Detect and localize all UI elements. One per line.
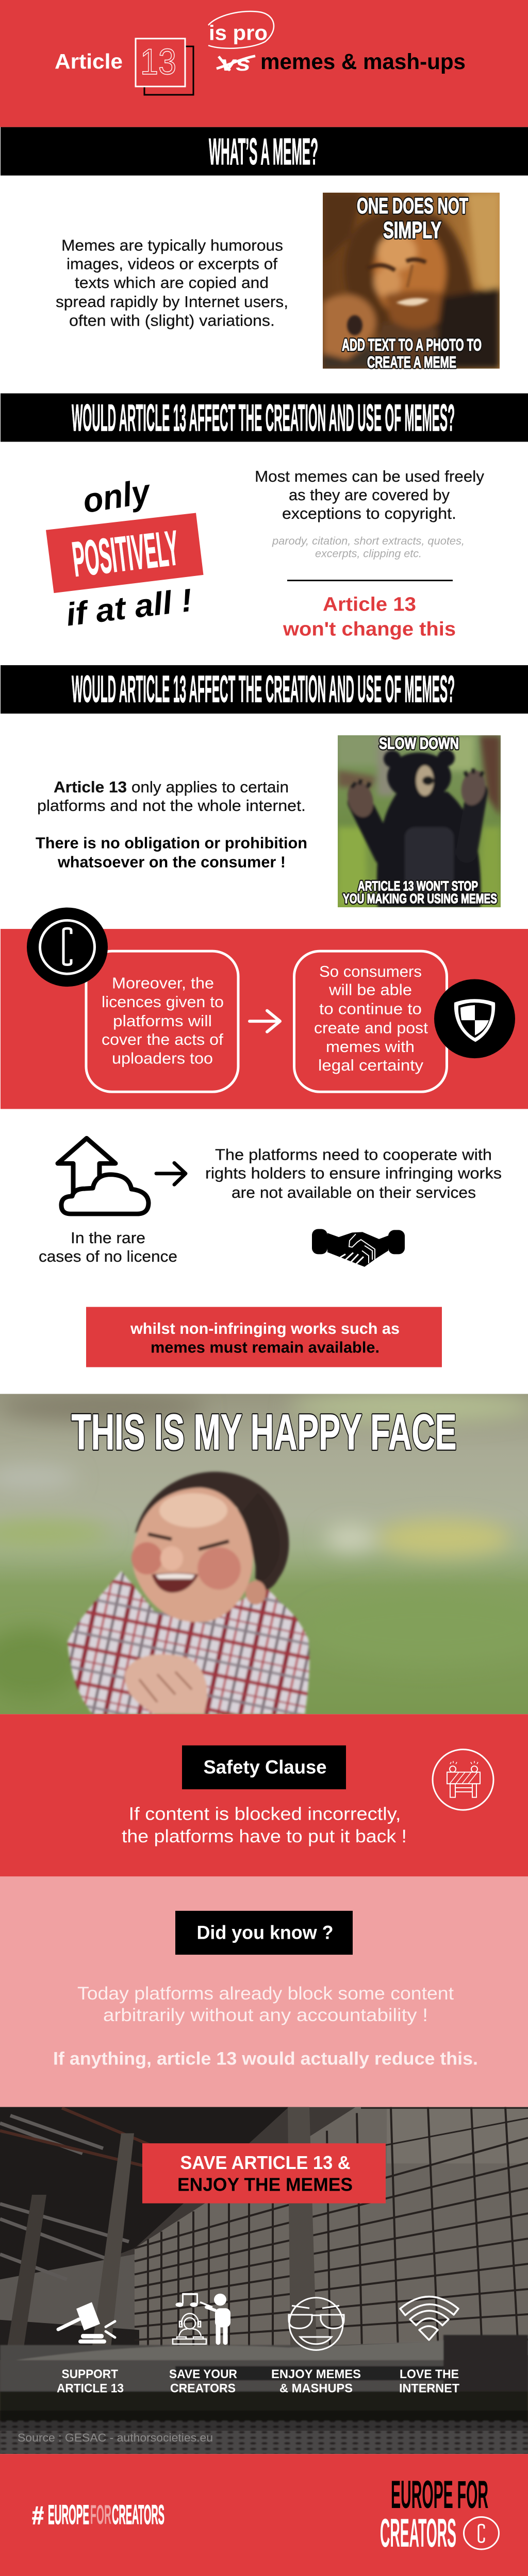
meme captions: ONE DOES NOT	[357, 194, 468, 218]
text block: platforms block arbitrarily: Today platforms already block some content	[77, 1984, 454, 2004]
text block: meme definition: spread rapidly by Internet users,	[56, 293, 288, 311]
meme captions: SLOW DOWN	[379, 734, 459, 753]
icon: road barrier	[433, 1750, 493, 1810]
card: licences cover uploaders	[86, 951, 238, 1092]
text block: most memes can be used freely: exceptions to copyright.	[282, 505, 456, 522]
label: safety clause	[182, 1745, 346, 1789]
card: licences cover uploaders: platforms will	[113, 1012, 212, 1030]
meme captions: ONE DOES NOT	[357, 194, 468, 218]
text block: exception examples	[272, 534, 465, 560]
text: hashtag: #	[32, 2502, 44, 2530]
logo: europe for creators	[380, 2473, 499, 2555]
text block: article 13 scope: whatsoever on the consumer !	[57, 854, 286, 871]
text block: meme definition: Memes are typically humorous	[61, 237, 283, 254]
icon: handshake	[312, 1229, 405, 1267]
labels: four actions	[57, 2367, 459, 2396]
banner: save article 13: ENJOY THE MEMES	[177, 2174, 353, 2195]
labels: four actions: CREATORS	[170, 2382, 236, 2396]
panel: safety clause	[0, 1714, 528, 1876]
meme captions: SIMPLY	[383, 217, 441, 243]
card: licences cover uploaders: cover the acts of	[102, 1031, 223, 1048]
card: consumers can continue: So consumers	[319, 963, 422, 980]
text block: meme definition: images, videos or excerpts of	[67, 256, 277, 273]
text block: exception examples: excerpts, clipping etc.	[315, 547, 422, 560]
text block: most memes can be used freely: Most memes can be used freely	[255, 468, 485, 485]
text block: platforms block arbitrarily: If anything, article 13 would actually reduce this.	[53, 2048, 478, 2069]
icon: article 13 box	[136, 39, 193, 95]
text block: content blocked: the platforms have to put it back !	[122, 1826, 407, 1846]
labels: four actions: SAVE YOUR	[169, 2367, 237, 2381]
card: consumers can continue: memes with	[326, 1038, 415, 1056]
meme captions	[342, 194, 482, 371]
image: one does not simply meme	[323, 193, 500, 371]
meme captions: ARTICLE 13 WON'T STOP	[358, 879, 478, 894]
text: POSITIVELY	[70, 520, 182, 587]
text block: article 13 scope	[36, 778, 307, 871]
text block: content blocked	[122, 1804, 407, 1846]
meme captions	[343, 734, 497, 906]
panel: page header	[0, 0, 528, 127]
text block: content blocked: If content is blocked incorrectly,	[129, 1804, 401, 1824]
text block: platforms need to cooperate: rights holders to ensure infringing works	[205, 1165, 502, 1182]
text: memes and mash-ups: memes & mash-ups	[260, 50, 466, 74]
meme captions: ARTICLE 13 WON'T STOP	[358, 879, 478, 894]
callout: non-infringing works remain available: whilst non-infringing works such as	[130, 1320, 400, 1337]
card: consumers can continue	[294, 951, 447, 1092]
icon: upload to cloud	[58, 1138, 148, 1214]
text block: platforms need to cooperate: The platforms need to cooperate with	[215, 1146, 492, 1163]
image: slow down bear meme	[338, 734, 501, 907]
text: is pro with hand-drawn circle: is pro	[209, 21, 268, 44]
panel: footer: CREATORS	[112, 2500, 164, 2530]
text block: article 13 won't change this: Article 13	[323, 594, 416, 615]
text block: rare cases of no licence: In the rare	[71, 1229, 145, 1247]
image: train station background	[0, 2107, 528, 2454]
badge: positively	[46, 513, 203, 593]
text: source: Source : GESAC - authorsocieties.eu	[18, 2431, 213, 2444]
icon: wifi	[400, 2297, 458, 2340]
panel: footer	[0, 2454, 528, 2576]
text block: article 13 scope: There is no obligation or prohibition	[36, 835, 307, 852]
icon: article 13 box: 13	[140, 42, 176, 82]
icon: shield badge	[434, 979, 515, 1058]
text: hashtag: EUROPE	[48, 2500, 89, 2530]
text: if at all: if at all !	[64, 582, 194, 633]
text block: meme definition: often with (slight) variations.	[69, 312, 275, 329]
text: hashtag: FOR	[90, 2500, 111, 2530]
banner: save article 13: SAVE ARTICLE 13 &	[180, 2152, 351, 2173]
card: consumers can continue: to continue to	[319, 1001, 422, 1018]
icon: gavel	[58, 2302, 115, 2344]
label: safety clause: Safety Clause	[203, 1756, 326, 1778]
text block: article 13 scope: Article 13 only applies to certain	[54, 778, 289, 796]
callout: only positively if at all	[46, 472, 203, 633]
text block: platforms block arbitrarily: arbitrarily without any accountability !	[103, 2005, 428, 2025]
labels: four actions: SUPPORT	[62, 2367, 118, 2381]
banner: save article 13	[142, 2143, 386, 2204]
meme captions: CREATE A MEME	[367, 353, 456, 371]
card: licences cover uploaders: uploaders too	[112, 1050, 213, 1067]
text block: article 13 won't change this: won't change this	[283, 618, 456, 640]
text: Article: Article	[55, 49, 123, 73]
labels: four actions: INTERNET	[399, 2382, 459, 2396]
text block: article 13 scope: platforms and not the whole internet.	[37, 797, 306, 815]
label: did you know: Did you know ?	[197, 1922, 333, 1943]
card: consumers can continue: create and post	[314, 1020, 428, 1037]
text block: meme definition: texts which are copied and	[75, 274, 269, 292]
labels: four actions: ARTICLE 13	[57, 2382, 124, 2396]
text block: rare cases of no licence: cases of no licence	[39, 1248, 177, 1265]
text block: exception examples: parody, citation, short extracts, quotes,	[272, 534, 465, 547]
text: is pro with hand-drawn circle	[208, 11, 274, 48]
text block: article 13 won't change this	[283, 594, 456, 640]
meme captions: CREATE A MEME	[367, 353, 456, 371]
text: only: only	[80, 472, 154, 520]
panel: save article 13 call to action	[0, 2107, 528, 2454]
arrow: no licence to cooperation	[156, 1163, 186, 1184]
arrow: licences to consumers	[250, 1011, 280, 1032]
text block: rare cases of no licence	[39, 1229, 177, 1265]
text block: platforms need to cooperate: are not available on their services	[232, 1184, 476, 1201]
labels: four actions: ENJOY MEMES	[271, 2367, 361, 2381]
heading: what's a meme	[1, 127, 528, 176]
callout: non-infringing works remain available	[86, 1307, 442, 1367]
label: did you know	[175, 1911, 353, 1955]
card: licences cover uploaders: Moreover, the	[112, 975, 214, 992]
callout: non-infringing works remain available: memes must remain available.	[151, 1339, 380, 1356]
panel: did you know	[0, 1876, 528, 2107]
card: licences cover uploaders: licences given to	[102, 993, 224, 1011]
panel: licences and legal certainty	[1, 907, 528, 1109]
text: crossed out vs: vs	[221, 51, 251, 75]
card: consumers can continue: legal certainty	[318, 1057, 424, 1074]
card: consumers can continue: will be able	[328, 981, 412, 998]
text block: most memes can be used freely	[255, 468, 485, 522]
text block: meme definition	[56, 237, 288, 329]
labels: four actions: LOVE THE	[400, 2367, 459, 2381]
text block: platforms block arbitrarily	[53, 1984, 478, 2069]
text block: platforms need to cooperate	[205, 1146, 502, 1201]
labels: four actions: & MASHUPS	[279, 2382, 353, 2396]
icon: copyright badge	[27, 907, 108, 987]
text block: most memes can be used freely: as they are covered by	[289, 486, 450, 504]
meme captions: SLOW DOWN	[379, 734, 459, 753]
image: this is my happy face meme	[0, 1392, 528, 1714]
text: crossed out vs	[217, 51, 255, 75]
meme captions: SIMPLY	[383, 217, 441, 243]
icon: dj and singer	[173, 2294, 230, 2344]
icon: smiley with sunglasses	[289, 2298, 344, 2350]
